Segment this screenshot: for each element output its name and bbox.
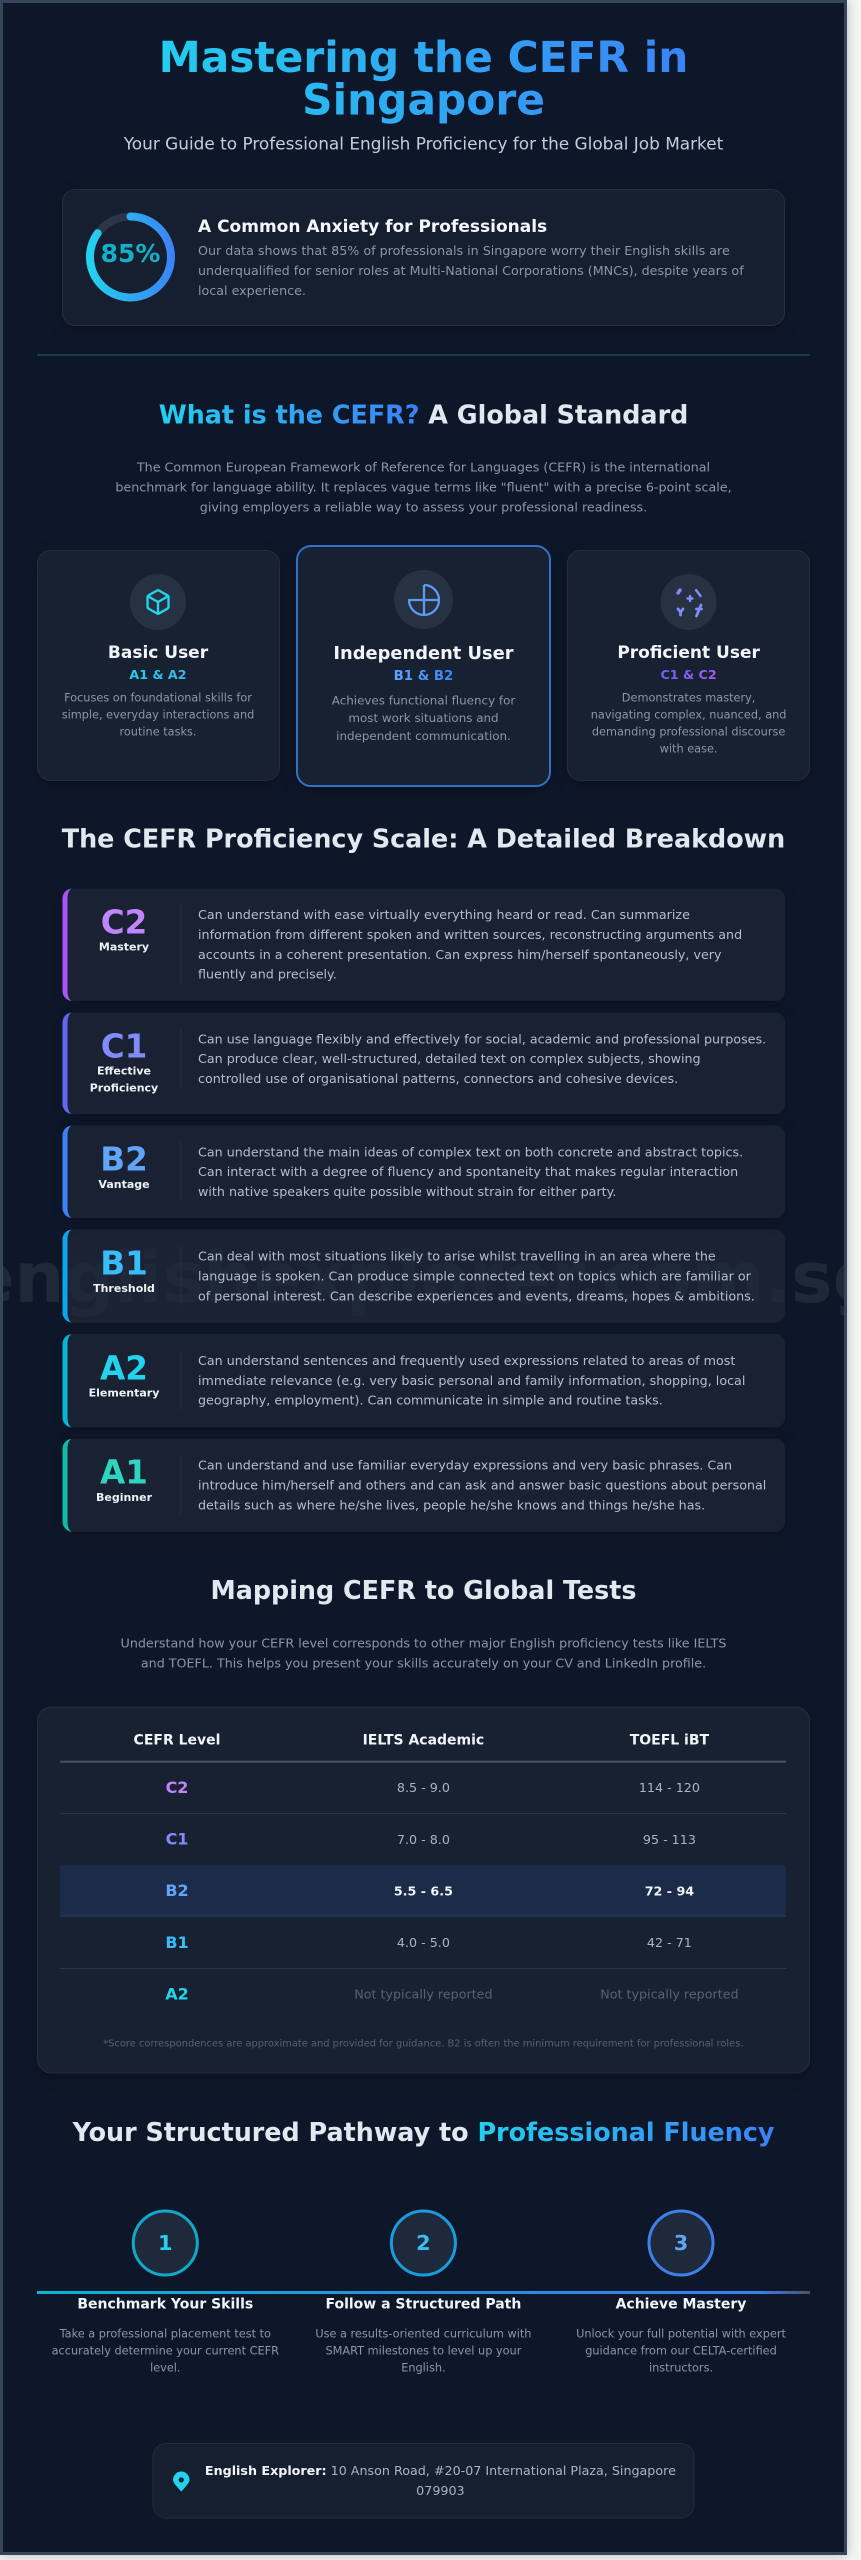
level badge	[89, 1349, 159, 1400]
level card: B2	[62, 1126, 785, 1218]
level description: introduce him/herself and others and can ask and answer basic questions about personal	[198, 1478, 766, 1492]
heading: what is the CEFR: What is the CEFR? A Global Standard	[159, 400, 688, 430]
level description: immediate relevance (e.g. very basic personal and family information, shopping, local	[198, 1373, 745, 1388]
row: C2: C2	[166, 1778, 188, 1797]
row: B2 highlighted: 72 - 94	[645, 1883, 694, 1898]
intro paragraph: benchmark for language ability. It replaces vague terms like "fluent" with a precise 6-point scale,	[115, 480, 732, 495]
level description: Can produce clear, well-structured, detailed text on complex subjects, showing	[198, 1051, 701, 1066]
card heading: Proficient User	[617, 643, 760, 663]
level badge: B1	[100, 1245, 148, 1283]
level tag: A1 & A2	[129, 667, 187, 682]
table: test score comparison	[38, 1707, 810, 2073]
stat heading: A Common Anxiety for Professionals	[198, 217, 547, 237]
table footnote: *Score correspondences are approximate and provided for guidance. B2 is often the minimum requirement for professional roles.	[103, 2039, 744, 2050]
level badge: Elementary	[89, 1387, 159, 1400]
step number circle: 3	[674, 2231, 688, 2255]
step 3	[576, 2211, 786, 2374]
intro paragraph: giving employers a reliable way to assess your professional readiness.	[200, 500, 647, 514]
row: B2 highlighted	[60, 1865, 786, 1916]
step number circle: 2	[416, 2231, 431, 2255]
card heading: Independent User	[333, 643, 514, 664]
level description: Can understand sentences and frequently used expressions related to areas of most	[198, 1353, 735, 1368]
intro paragraph: The Common European Framework of Reference for Languages (CEFR) is the international	[136, 460, 710, 475]
level badge: A2	[100, 1349, 148, 1387]
table header: IELTS Academic	[363, 1732, 484, 1748]
level badge: C2	[101, 903, 147, 941]
step heading: Follow a Structured Path	[325, 2296, 521, 2312]
title: Singapore	[302, 76, 545, 124]
row: A2: Not typically reported	[354, 1987, 493, 2002]
level description: Can understand with ease virtually everything heard or read. Can summarize	[198, 907, 690, 922]
heading: pathway: Your Structured Pathway to Professional Fluency	[72, 2117, 775, 2147]
level description: controlled use of organisational patterns, connectors and cohesive devices.	[198, 1071, 678, 1086]
step description: instructors.	[649, 2361, 713, 2374]
level badge: Proficiency	[90, 1082, 158, 1095]
step heading: Achieve Mastery	[616, 2296, 746, 2312]
card description: simple, everyday interactions and	[62, 709, 254, 722]
card description: navigating complex, nuanced, and	[591, 709, 786, 722]
row: B1	[165, 1933, 692, 1952]
level badge: Beginner	[96, 1491, 153, 1504]
stat description: underqualified for senior roles at Multi-National Corporations (MNCs), despite years of	[198, 263, 744, 278]
timeline arrow line	[37, 2291, 810, 2294]
level badge	[90, 1028, 158, 1095]
row: C1: C1	[166, 1830, 188, 1849]
step description: SMART milestones to level up your	[325, 2344, 522, 2357]
step number circle	[133, 2211, 197, 2275]
panel: independent user	[297, 546, 550, 786]
row: C2: 114 - 120	[639, 1780, 700, 1795]
level description: with native speakers quite possible without strain for either party.	[198, 1184, 616, 1199]
table header: TOEFL iBT	[630, 1732, 710, 1748]
step description: Use a results-oriented curriculum with	[315, 2327, 531, 2340]
step number circle: 1	[158, 2231, 173, 2255]
stat description: Our data shows that 85% of professionals in Singapore worry their English skills are	[198, 243, 730, 258]
panel: basic user	[38, 550, 280, 780]
row: C1	[166, 1830, 696, 1849]
level description: details such as where he/she lives, people he/she knows and things he/she has.	[198, 1497, 705, 1512]
level description: Can deal with most situations likely to arise whilst travelling in an area where the	[198, 1249, 716, 1264]
row: C1: 7.0 - 8.0	[397, 1832, 450, 1847]
donut chart: 85 percent: 85%	[101, 239, 160, 268]
row: B1: 4.0 - 5.0	[397, 1935, 450, 1950]
level tag: B1 & B2	[394, 669, 453, 684]
mapping paragraph: and TOEFL. This helps you present your skills accurately on your CV and LinkedIn profile.	[141, 1655, 706, 1670]
address text: 079903	[416, 2483, 465, 2498]
level description: information from different spoken and written sources, reconstructing arguments and	[198, 927, 742, 942]
level badge: C1	[101, 1028, 147, 1066]
level card: C2	[62, 888, 785, 1001]
level card: A2	[62, 1334, 785, 1428]
subtitle: Your Guide to Professional English Proficiency for the Global Job Market	[123, 134, 724, 154]
step number circle	[391, 2211, 455, 2275]
card description: Demonstrates mastery,	[622, 692, 755, 705]
table header	[134, 1732, 710, 1748]
address text: English Explorer: 10 Anson Road, #20-07 International Plaza, Singapore	[205, 2463, 676, 2478]
step description: English.	[401, 2361, 446, 2374]
level description: Can understand the main ideas of complex text on both concrete and abstract topics.	[198, 1144, 743, 1159]
row: C2	[166, 1778, 700, 1797]
level badge	[96, 1454, 153, 1504]
level badge: Vantage	[98, 1178, 150, 1191]
level card: B1	[62, 1230, 785, 1322]
level tag: C1 & C2	[661, 667, 717, 682]
row: B1: B1	[165, 1933, 189, 1952]
level badge: B2	[100, 1141, 148, 1179]
level badge: A1	[100, 1454, 148, 1492]
level description: geography, employment). Can communicate in simple and routine tasks.	[198, 1393, 663, 1408]
level badge: Threshold	[93, 1282, 155, 1295]
card heading: Basic User	[108, 643, 209, 663]
icon: sparkle marks	[661, 574, 717, 630]
row: A2: A2	[165, 1984, 189, 2003]
level description: Can use language flexibly and effectively for social, academic and professional purposes.	[198, 1031, 766, 1046]
level card: A1	[62, 1439, 785, 1532]
level description: of personal interest. Can describe experiences and events, dreams, hopes & ambitions.	[198, 1288, 755, 1303]
row: C2: 8.5 - 9.0	[397, 1780, 450, 1795]
heading: mapping CEFR: Mapping CEFR to Global Tests	[210, 1575, 637, 1605]
card description: Focuses on foundational skills for	[64, 692, 252, 705]
level description: language is spoken. Can produce simple connected text on topics which are familiar or	[198, 1268, 752, 1284]
icon: map pin	[173, 2472, 190, 2492]
card description: Achieves functional fluency for	[332, 693, 515, 707]
level badge	[99, 903, 149, 954]
donut chart: 85 percent	[90, 216, 171, 298]
title: Mastering the CEFR in	[159, 33, 688, 82]
mapping paragraph: Understand how your CEFR level corresponds to other major English proficiency tests like IELTS	[121, 1635, 726, 1650]
level badge: Effective	[97, 1065, 151, 1078]
step description: Unlock your full potential with expert	[576, 2327, 786, 2340]
row: C1: 95 - 113	[643, 1832, 696, 1847]
table header: CEFR Level	[134, 1732, 220, 1748]
row: B1: 42 - 71	[647, 1935, 692, 1950]
step 1	[52, 2211, 279, 2374]
icon: cube	[130, 574, 186, 630]
step description: guidance from our CELTA-certified	[585, 2344, 777, 2357]
row: B2 highlighted: B2	[165, 1881, 189, 1900]
card description: most work situations and	[348, 711, 499, 725]
step description: level.	[150, 2361, 181, 2374]
panel: proficient user	[568, 550, 810, 780]
icon: quartered circle	[394, 570, 453, 629]
step 2	[315, 2211, 531, 2374]
row: A2: Not typically reported	[600, 1987, 739, 2002]
step heading: Benchmark Your Skills	[77, 2296, 253, 2312]
level card: C1	[62, 1012, 785, 1114]
level description: Can understand and use familiar everyday expressions and very basic phrases. Can	[198, 1458, 732, 1473]
card description: routine tasks.	[120, 726, 196, 739]
step number circle	[649, 2211, 713, 2275]
card description: demanding professional discourse	[592, 726, 785, 739]
level description: accounts in a coherent presentation. Can express him/herself spontaneously, very	[198, 947, 722, 962]
row: B2 highlighted: 5.5 - 6.5	[394, 1883, 453, 1898]
step description: Take a professional placement test to	[59, 2327, 271, 2340]
step description: accurately determine your current CEFR	[52, 2344, 279, 2357]
heading: proficiency scale: The CEFR Proficiency Scale: A Detailed Breakdown	[62, 823, 785, 853]
row: A2	[165, 1984, 739, 2003]
level description: Can interact with a degree of fluency and spontaneity that makes regular interaction	[198, 1164, 738, 1179]
footer panel: address	[153, 2444, 694, 2518]
level description: fluently and precisely.	[198, 966, 337, 982]
stat description: local experience.	[198, 283, 306, 298]
level badge: Mastery	[99, 941, 149, 954]
card description: independent communication.	[336, 729, 511, 743]
panel: common anxiety stat	[62, 190, 784, 326]
card description: with ease.	[660, 743, 718, 756]
level badge	[93, 1245, 155, 1295]
